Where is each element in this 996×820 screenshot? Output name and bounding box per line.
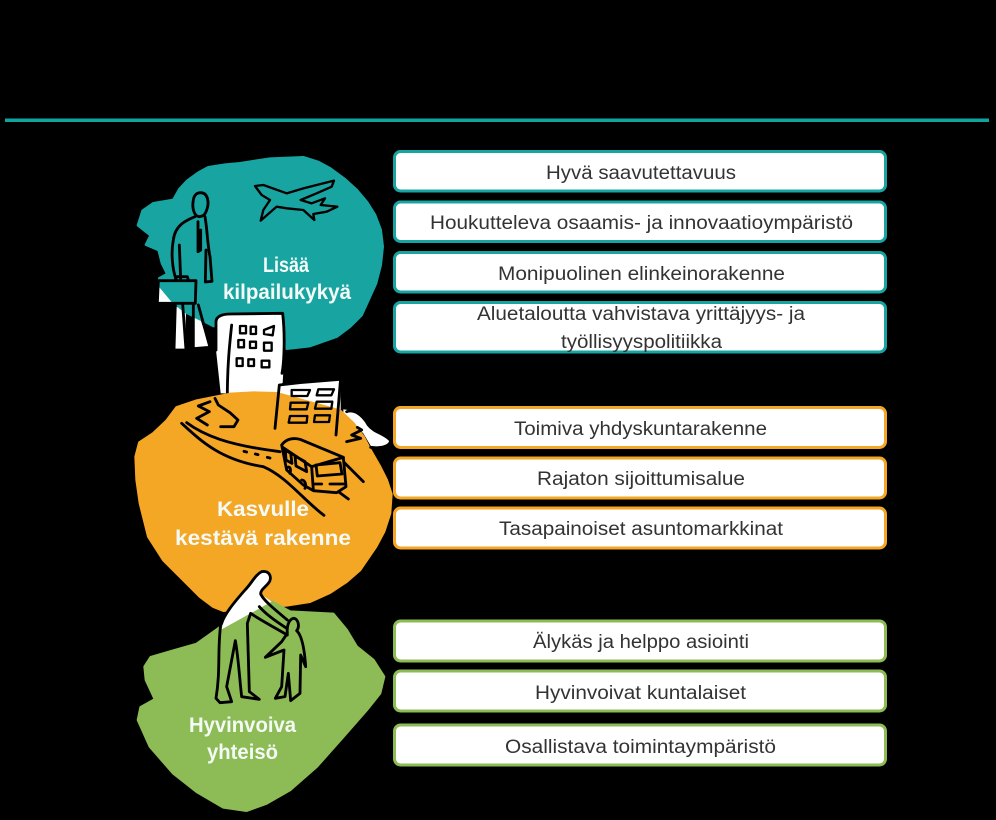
icon: right bush white cloud (343, 409, 391, 448)
item: Aluetaloutta vahvistava yrittäjyys- ja työllisyyspolitiikka (394, 302, 886, 353)
blob: teal (138, 157, 383, 349)
panel: wellbeing blob (138, 571, 384, 811)
item: Houkutteleva osaamis- ja innovaatioympäristö (394, 202, 886, 242)
item: Hyvä saavutettavuus: Hyvä saavutettavuus (546, 163, 736, 184)
label: Lisää kilpailukykyä: kilpailukykyä (223, 281, 351, 304)
item: Osallistava toimintaympäristö: Osallistava toimintaympäristö (505, 737, 776, 758)
item: Hyvä saavutettavuus (394, 152, 886, 191)
panel: growth structure blob (136, 378, 391, 611)
icon: road (182, 423, 363, 515)
label: Lisää kilpailukykyä: Lisää (263, 254, 309, 277)
header rule (5, 118, 989, 122)
item: Monipuolinen elinkeinorakenne (394, 252, 886, 292)
item: Aluetaloutta vahvistava yrittäjyys- ja työllisyyspolitiikka: työllisyyspolitiikka (561, 332, 722, 353)
label: Kasvulle kestävä rakenne: kestävä rakenne (175, 527, 351, 550)
label: Lisää kilpailukykyä (223, 254, 351, 304)
label: Kasvulle kestävä rakenne (175, 498, 351, 550)
icon: bush left (197, 398, 238, 427)
label: Hyvinvoiva yhteisö: yhteisö (207, 741, 278, 764)
item: Toimiva yhdyskuntarakenne: Toimiva yhdyskuntarakenne (514, 419, 767, 440)
item: Tasapainoiset asuntomarkkinat (394, 508, 886, 548)
blob: orange (136, 393, 391, 611)
icon: tall building (216, 313, 284, 397)
icon: second building white top (277, 378, 341, 412)
icon: businessman (157, 193, 212, 350)
label: Kasvulle kestävä rakenne: Kasvulle (217, 498, 309, 521)
label: Hyvinvoiva yhteisö (189, 714, 296, 764)
item: Rajaton sijoittumisalue: Rajaton sijoittumisalue (537, 469, 745, 490)
item: Osallistava toimintaympäristö (394, 725, 886, 765)
item: Toimiva yhdyskuntarakenne (394, 408, 886, 448)
item: Monipuolinen elinkeinorakenne: Monipuolinen elinkeinorakenne (498, 264, 785, 285)
icon: second building (275, 378, 341, 435)
blob: green (138, 602, 384, 811)
icon: airplane (255, 181, 337, 221)
item: Hyvinvoivat kuntalaiset (394, 671, 886, 711)
panel: competitiveness blob (138, 157, 383, 397)
panel: teal list (394, 152, 886, 353)
item: Tasapainoiset asuntomarkkinat: Tasapainoiset asuntomarkkinat (499, 519, 784, 540)
icon: bus (282, 439, 346, 493)
item: Älykäs ja helppo asiointi (394, 621, 886, 661)
item: Aluetaloutta vahvistava yrittäjyys- ja työllisyyspolitiikka: Aluetaloutta vahvistava yrittäjyys- ja (477, 304, 805, 325)
item: Älykäs ja helppo asiointi: Älykäs ja helppo asiointi (533, 632, 749, 653)
icon: adult and child (216, 571, 306, 703)
item: Rajaton sijoittumisalue (394, 458, 886, 498)
icon: bush right (347, 411, 391, 448)
panel: green list (394, 621, 886, 765)
icon: white legs and briefcase corner under blob (158, 285, 210, 351)
panel: orange list (394, 408, 886, 548)
item: Hyvinvoivat kuntalaiset: Hyvinvoivat kuntalaiset (535, 683, 747, 704)
label: Hyvinvoiva yhteisö: Hyvinvoiva (189, 714, 296, 737)
item: Houkutteleva osaamis- ja innovaatioympäristö: Houkutteleva osaamis- ja innovaatioympäristö (430, 213, 853, 234)
icon: briefcase (157, 277, 196, 303)
